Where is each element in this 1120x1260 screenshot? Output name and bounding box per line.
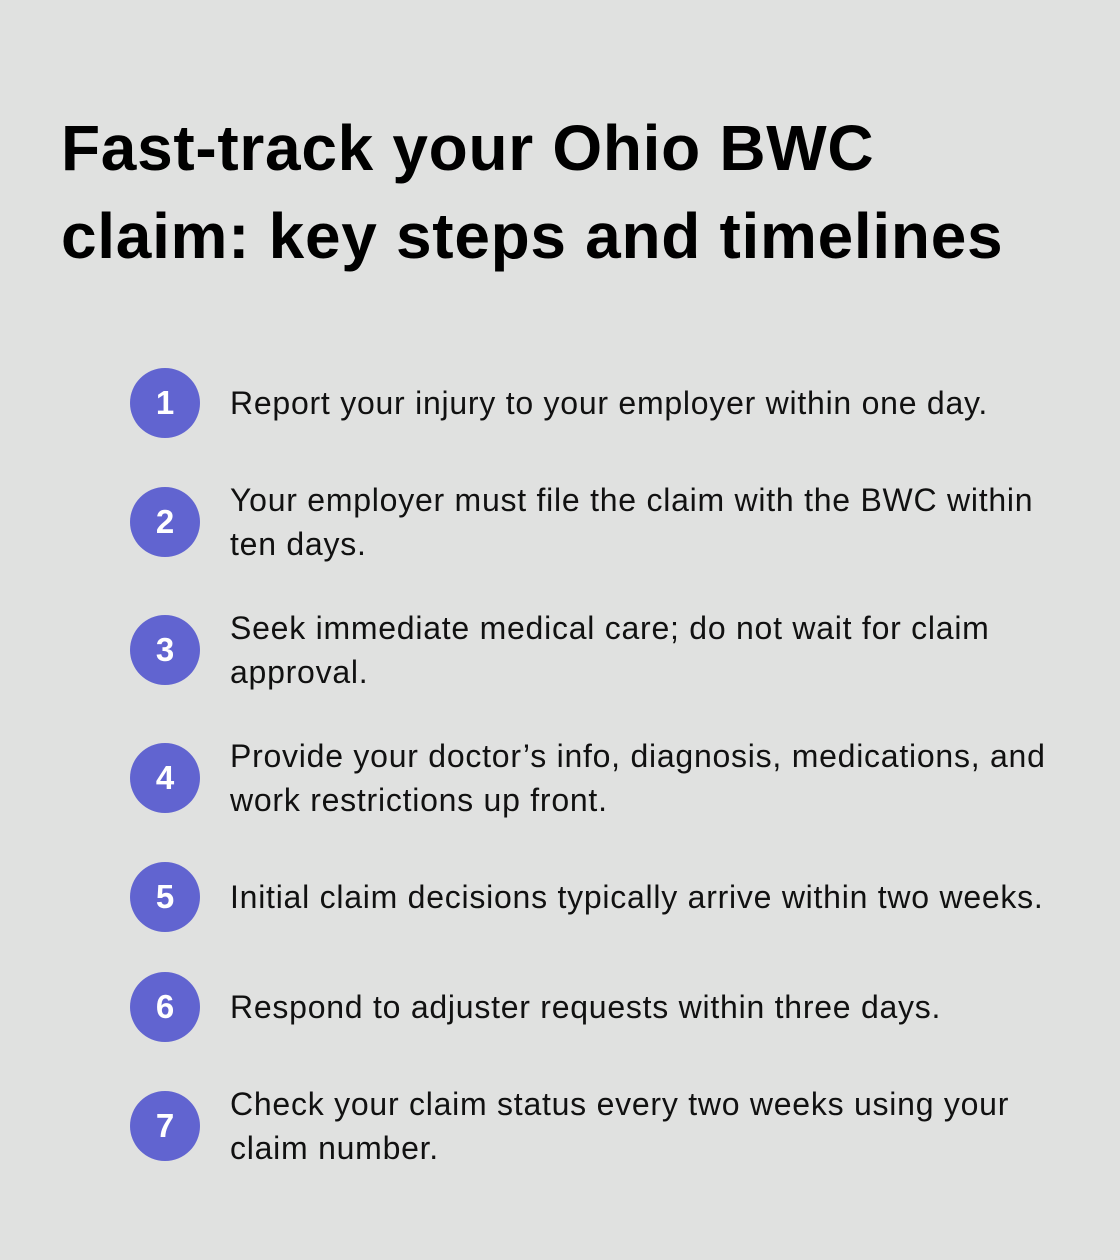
step 6 bbox=[130, 972, 941, 1042]
text 4: work restrictions up front. bbox=[230, 782, 608, 818]
text 3: approval. bbox=[230, 654, 368, 690]
text 3: Seek immediate medical care; do not wait for claim bbox=[230, 610, 990, 646]
text 1: Report your injury to your employer within one day. bbox=[230, 385, 988, 421]
text 2: ten days. bbox=[230, 526, 367, 562]
text 7: claim number. bbox=[230, 1130, 439, 1166]
text 5: Initial claim decisions typically arrive within two weeks. bbox=[230, 879, 1044, 915]
badge 7 bbox=[130, 1091, 200, 1161]
badge 6 bbox=[130, 972, 200, 1042]
badge 1 bbox=[130, 368, 200, 438]
step 4 bbox=[130, 738, 1046, 818]
text 2: Your employer must file the claim with the BWC within bbox=[230, 482, 1033, 518]
step 2 bbox=[130, 482, 1033, 562]
title: Fast-track your Ohio BWC bbox=[61, 112, 874, 184]
badge 3 bbox=[130, 615, 200, 685]
badge 5 bbox=[130, 862, 200, 932]
step 5 bbox=[130, 862, 1044, 932]
badge 4: 4 bbox=[156, 759, 174, 796]
step 1 bbox=[130, 368, 988, 438]
text 3 bbox=[230, 610, 990, 690]
text 6: Respond to adjuster requests within three days. bbox=[230, 989, 941, 1025]
badge 4 bbox=[130, 743, 200, 813]
step 7 bbox=[130, 1086, 1009, 1166]
badge 6: 6 bbox=[156, 988, 174, 1025]
text 7 bbox=[230, 1086, 1009, 1166]
badge 5: 5 bbox=[156, 878, 174, 915]
text 2 bbox=[230, 482, 1033, 562]
text 7: Check your claim status every two weeks using your bbox=[230, 1086, 1009, 1122]
title: claim: key steps and timelines bbox=[61, 200, 1003, 272]
badge 7: 7 bbox=[156, 1107, 174, 1144]
badge 2: 2 bbox=[156, 503, 174, 540]
step 3 bbox=[130, 610, 990, 690]
title bbox=[61, 112, 1003, 272]
text 4: Provide your doctor’s info, diagnosis, medications, and bbox=[230, 738, 1046, 774]
badge 1: 1 bbox=[156, 384, 174, 421]
badge 2 bbox=[130, 487, 200, 557]
text 4 bbox=[230, 738, 1046, 818]
badge 3: 3 bbox=[156, 631, 174, 668]
